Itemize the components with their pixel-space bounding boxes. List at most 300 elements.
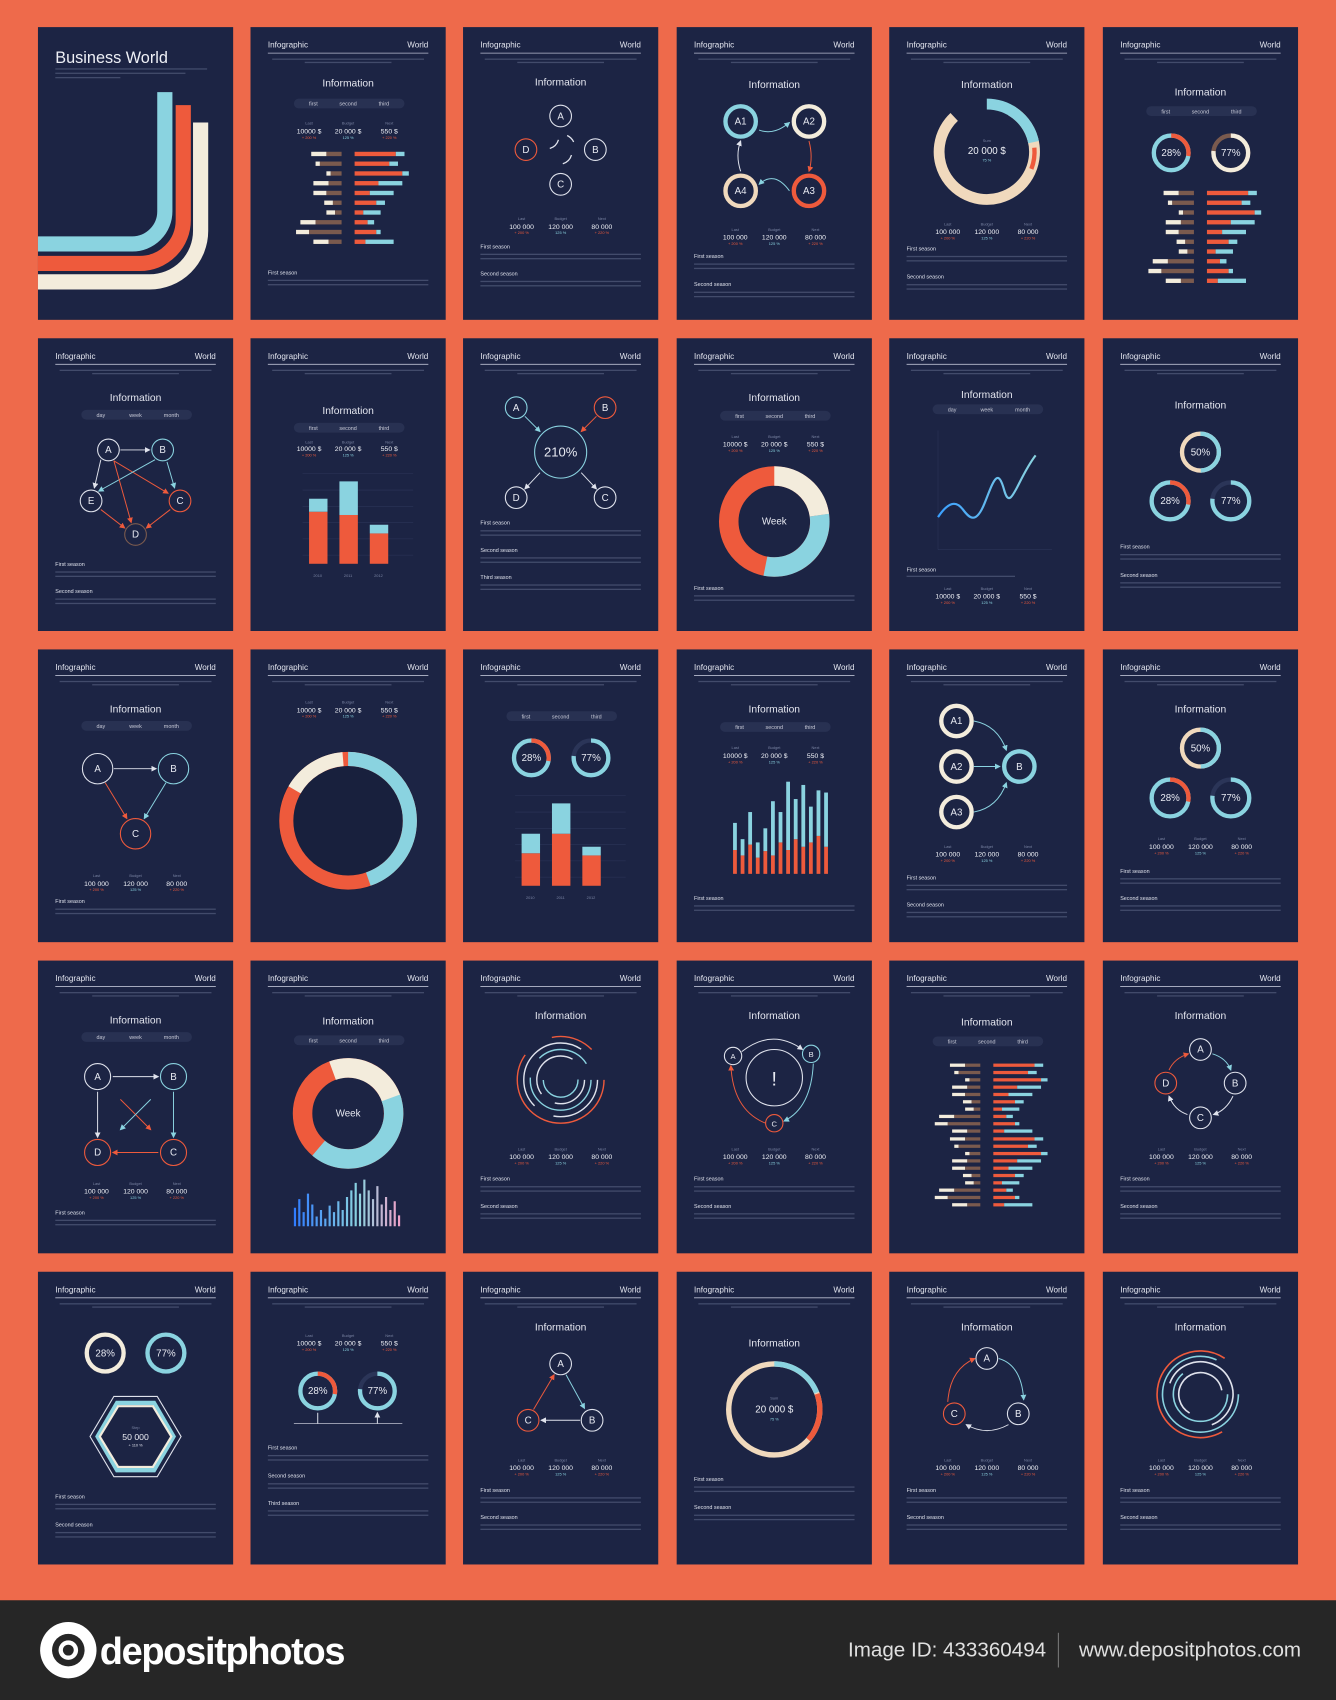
card 10: Week donut: + 220 %: [808, 448, 823, 453]
card 19: square ABCD: Information: [110, 1015, 162, 1026]
card 18: three donuts with stats: Infographic: [1120, 663, 1160, 672]
card 18: three donuts with stats: 125 %: [1195, 850, 1206, 855]
card 7: graph ABCDE: A: [105, 445, 112, 456]
card 21: concentric arcs: 80 000: [591, 1154, 612, 1161]
card 24: cycle ABCD: Last: [1158, 1146, 1166, 1151]
card 29: ABC arc cycle: Second season: [907, 1515, 944, 1521]
card 6: donuts + bars: [1103, 27, 1298, 320]
card 30: concentric rings: Second season: [1120, 1515, 1157, 1521]
card 10: Week donut: [677, 338, 872, 631]
card 27: triangle cycle: Last: [518, 1457, 526, 1462]
card 28: sum ring: Sum: [770, 1396, 778, 1401]
card 13: triangle ABC: 80 000: [166, 881, 187, 888]
card 30: concentric rings: + 200 %: [1154, 1472, 1169, 1477]
card 8: 3-bar chart: second: [339, 426, 357, 432]
card 12: three donuts: 77%: [1221, 496, 1241, 507]
card 13: triangle ABC: Next: [173, 873, 182, 878]
card 25: donuts + hexagon: 50 000: [122, 1432, 149, 1442]
card 18: three donuts with stats: World: [1260, 663, 1281, 672]
card 30: concentric rings: Budget: [1194, 1457, 1208, 1462]
card 5: sum ring: [889, 27, 1084, 320]
card 13: triangle ABC: World: [195, 663, 216, 672]
card 3: circles ABCD: 125 %: [555, 230, 567, 235]
card 27: triangle cycle: First season: [480, 1488, 510, 1494]
card 11: line chart: day: [948, 407, 957, 413]
card 19: square ABCD: Infographic: [55, 974, 96, 983]
card 3: circles ABCD: 100 000: [509, 224, 534, 231]
card 16: multi bar chart: Infographic: [694, 663, 734, 672]
card 13: triangle ABC: Last: [93, 873, 101, 878]
card 22: exclamation cycle: Next: [811, 1146, 820, 1151]
card 2: butterfly bars: + 200 %: [302, 135, 317, 140]
card 10: Week donut: 550 $: [807, 442, 824, 449]
card 3: circles ABCD: Infographic: [480, 41, 521, 50]
card 7: graph ABCDE: E: [88, 496, 95, 507]
card 4: A1-A4 ring cycle: 125 %: [769, 241, 780, 246]
card 26: stats + donuts + seasons: 550 $: [381, 1340, 398, 1347]
card 22: exclamation cycle: First season: [694, 1177, 723, 1183]
card 17: A1 A2 A3 to B: Budget: [981, 844, 994, 849]
card 11: line chart: month: [1015, 407, 1030, 413]
card 17: A1 A2 A3 to B: 80 000: [1018, 852, 1039, 859]
card 18: three donuts with stats: Second season: [1120, 896, 1157, 902]
card 13: triangle ABC: Information: [110, 704, 162, 715]
card 23: butterfly bars: third: [1017, 1040, 1028, 1046]
card 17: A1 A2 A3 to B: First season: [907, 875, 936, 881]
card 17: A1 A2 A3 to B: 120 000: [974, 852, 999, 859]
card 22: exclamation cycle: A: [731, 1052, 737, 1061]
card 2: butterfly bars: World: [407, 41, 428, 50]
card 18: three donuts with stats: 100 000: [1149, 844, 1174, 851]
card 11: line chart: Infographic: [907, 352, 947, 361]
card 11: line chart: 20 000 $: [974, 593, 1000, 600]
card 29: ABC arc cycle: C: [951, 1409, 958, 1420]
card 18: three donuts with stats: 77%: [1221, 793, 1241, 804]
card 8: 3-bar chart: Information: [322, 406, 374, 417]
card 25: donuts + hexagon: + 110 %: [128, 1442, 143, 1447]
card 24: cycle ABCD: Information: [1175, 1011, 1226, 1022]
card 13: triangle ABC: A: [94, 764, 101, 775]
card 5: sum ring: Last: [944, 222, 952, 227]
card 27: triangle cycle: 125 %: [555, 1472, 567, 1477]
card 26: stats + donuts + seasons: Infographic: [268, 1285, 308, 1294]
card 14: big ring: [250, 649, 446, 942]
card 8: 3-bar chart: + 200 %: [302, 452, 317, 457]
card 2: butterfly bars: Last: [305, 121, 314, 126]
card 27: triangle cycle: 80 000: [591, 1465, 612, 1472]
card 15: donuts + bar chart: Infographic: [480, 663, 521, 672]
card 6: donuts + bars: Information: [1175, 87, 1226, 98]
card 18: three donuts with stats: + 200 %: [1154, 850, 1169, 855]
card 27: triangle cycle: Infographic: [480, 1285, 521, 1294]
card 5: sum ring: 20 000 $: [968, 146, 1006, 157]
card 30: concentric rings: Last: [1158, 1457, 1166, 1462]
card 4: A1-A4 ring cycle: Last: [732, 227, 740, 232]
card 29: ABC arc cycle: Budget: [981, 1457, 994, 1462]
card 6: donuts + bars: first: [1161, 109, 1171, 115]
card 14: big ring: Next: [385, 700, 394, 705]
card 24: cycle ABCD: 125 %: [1195, 1160, 1206, 1165]
card 19: square ABCD: World: [195, 974, 216, 983]
card 17: A1 A2 A3 to B: 125 %: [981, 858, 993, 863]
footer image id: Image ID: 433360494: [848, 1639, 1046, 1662]
card 5: sum ring: Second season: [907, 275, 944, 281]
card 24: cycle ABCD: First season: [1120, 1177, 1150, 1183]
card 27: triangle cycle: World: [620, 1285, 641, 1294]
card 16: multi bar chart: 10000 $: [723, 753, 748, 760]
card 22: exclamation cycle: 80 000: [805, 1154, 826, 1161]
card 2: butterfly bars: third: [379, 102, 389, 108]
card 3: circles ABCD: C: [557, 180, 564, 191]
card 9: 210% hub: Infographic: [480, 352, 521, 361]
card 26: stats + donuts + seasons: Budget: [342, 1333, 355, 1338]
cover stripes: [38, 92, 201, 282]
card 2: butterfly bars: + 220 %: [382, 135, 397, 140]
card 27: triangle cycle: Information: [535, 1322, 587, 1333]
card 8: 3-bar chart: 20 000 $: [335, 446, 362, 453]
card 13: triangle ABC: First season: [55, 899, 85, 905]
card 27: triangle cycle: B: [589, 1416, 595, 1427]
card 16: multi bar chart: Last: [732, 745, 740, 750]
card 8: 3-bar chart: Last: [305, 439, 314, 444]
card 15: donuts + bar chart: 2011: [556, 895, 565, 900]
card 5: sum ring: Sum: [983, 138, 991, 143]
card 25: donuts + hexagon: 28%: [95, 1348, 115, 1359]
card 30: concentric rings: World: [1260, 1285, 1281, 1294]
card 4: A1-A4 ring cycle: 120 000: [762, 235, 787, 242]
card 10: Week donut: Last: [732, 434, 740, 439]
card 10: Week donut: Information: [749, 393, 800, 404]
card 11: line chart: 10000 $: [935, 593, 960, 600]
card 13: triangle ABC: week: [128, 724, 142, 730]
card 9: 210% hub: B: [602, 403, 608, 414]
card 4: A1-A4 ring cycle: World: [833, 41, 855, 50]
card 3: circles ABCD: [463, 27, 658, 320]
card 13: triangle ABC: 125 %: [130, 887, 142, 892]
card 11: line chart: [889, 338, 1084, 631]
card 11: line chart: Last: [944, 586, 952, 591]
card 7: graph ABCDE: Information: [110, 393, 162, 404]
card 25: donuts + hexagon: [38, 1272, 233, 1564]
card 19: square ABCD: 80 000: [166, 1189, 187, 1196]
card 17: A1 A2 A3 to B: A3: [950, 807, 962, 818]
card 25: donuts + hexagon: Infographic: [55, 1285, 96, 1294]
card 3: circles ABCD: + 200 %: [514, 230, 529, 235]
card 8: 3-bar chart: third: [379, 426, 389, 432]
card 3: circles ABCD: Second season: [480, 271, 518, 277]
card 12: three donuts: 28%: [1160, 496, 1180, 507]
card 7: graph ABCDE: First season: [55, 562, 85, 568]
card 12: three donuts: Second season: [1120, 573, 1157, 579]
card 26: stats + donuts + seasons: 77%: [368, 1386, 387, 1397]
card 5: sum ring: Budget: [981, 222, 994, 227]
card 20: week donut + histogram: third: [379, 1038, 389, 1044]
card 28: sum ring: Infographic: [694, 1285, 734, 1294]
card 24: cycle ABCD: B: [1232, 1078, 1238, 1089]
card 24: cycle ABCD: D: [1162, 1078, 1169, 1089]
card 19: square ABCD: 125 %: [130, 1195, 142, 1200]
card 16: multi bar chart: + 200 %: [728, 759, 743, 764]
card 3: circles ABCD: + 220 %: [595, 230, 610, 235]
card 24: cycle ABCD: + 220 %: [1234, 1160, 1249, 1165]
card 17: A1 A2 A3 to B: A2: [950, 762, 962, 773]
card 14: big ring: 20 000 $: [335, 707, 362, 714]
card 26: stats + donuts + seasons: + 200 %: [302, 1347, 317, 1352]
card 5: sum ring: 100 000: [935, 229, 960, 236]
card 21: concentric arcs: Infographic: [480, 974, 521, 983]
card 5: sum ring: World: [1046, 41, 1067, 50]
card 22: exclamation cycle: + 200 %: [728, 1160, 743, 1165]
card 10: Week donut: 20 000 $: [761, 442, 788, 449]
card 3: circles ABCD: 120 000: [548, 224, 573, 231]
card 23: butterfly bars: [889, 961, 1084, 1253]
card 22: exclamation cycle: [677, 961, 872, 1253]
card 29: ABC arc cycle: First season: [907, 1488, 936, 1494]
card 17: A1 A2 A3 to B: 100 000: [935, 852, 960, 859]
card 20: week donut + histogram: first: [309, 1038, 318, 1044]
card 3: circles ABCD: Last: [518, 216, 526, 221]
card 10: Week donut: Next: [811, 434, 820, 439]
card 4: A1-A4 ring cycle: Infographic: [694, 41, 734, 50]
card 8: 3-bar chart: first: [309, 426, 318, 432]
card 27: triangle cycle: 100 000: [509, 1465, 534, 1472]
card 28: sum ring: 75 %: [770, 1416, 779, 1421]
card 25: donuts + hexagon: 77%: [156, 1348, 176, 1359]
card 18: three donuts with stats: Last: [1158, 836, 1166, 841]
card 6: donuts + bars: World: [1260, 41, 1281, 50]
card 11: line chart: World: [1046, 352, 1067, 361]
card 2: butterfly bars: Next: [385, 121, 394, 126]
card 10: Week donut: 10000 $: [723, 442, 748, 449]
card 29: ABC arc cycle: + 220 %: [1021, 1472, 1036, 1477]
card 22: exclamation cycle: World: [833, 974, 855, 983]
card 8: 3-bar chart: World: [407, 352, 428, 361]
card 13: triangle ABC: Infographic: [55, 663, 96, 672]
card 14: big ring: + 220 %: [382, 714, 397, 719]
card 18: three donuts with stats: Budget: [1194, 836, 1208, 841]
card 14: big ring: 550 $: [381, 707, 398, 714]
card 4: A1-A4 ring cycle: + 220 %: [808, 241, 823, 246]
card 15: donuts + bar chart: second: [552, 714, 569, 720]
card 13: triangle ABC: day: [96, 724, 106, 730]
card 3: circles ABCD: 80 000: [591, 224, 612, 231]
card 4: A1-A4 ring cycle: 100 000: [723, 235, 748, 242]
card 28: sum ring: Information: [749, 1339, 800, 1350]
card 11: line chart: Next: [1024, 586, 1033, 591]
card 3: circles ABCD: A: [557, 111, 564, 122]
bars: [296, 152, 409, 244]
card 13: triangle ABC: + 220 %: [170, 887, 184, 892]
card 2: butterfly bars: first: [309, 102, 318, 108]
card 26: stats + donuts + seasons: First season: [268, 1446, 297, 1452]
card 16: multi bar chart: Information: [749, 704, 800, 715]
card 5: sum ring: Infographic: [907, 41, 947, 50]
card 20: week donut + histogram: [250, 961, 446, 1253]
card 24: cycle ABCD: Budget: [1194, 1146, 1208, 1151]
footer brand: depositphotos: [100, 1631, 344, 1673]
card 28: sum ring: First season: [694, 1477, 723, 1483]
card 24: cycle ABCD: 120 000: [1188, 1154, 1213, 1161]
card 20: week donut + histogram: Infographic: [268, 974, 308, 983]
card 17: A1 A2 A3 to B: + 200 %: [941, 858, 956, 863]
card 8: 3-bar chart: [250, 338, 446, 631]
card 7: graph ABCDE: Infographic: [55, 352, 96, 361]
card 10: Week donut: Week: [762, 517, 787, 528]
card 4: A1-A4 ring cycle: [677, 27, 872, 320]
card 4: A1-A4 ring cycle: Next: [811, 227, 820, 232]
card 9: 210% hub: World: [620, 352, 641, 361]
card 22: exclamation cycle: Infographic: [694, 974, 734, 983]
card 22: exclamation cycle: Last: [732, 1146, 740, 1151]
card 19: square ABCD: A: [94, 1072, 101, 1083]
card 22: exclamation cycle: + 220 %: [808, 1160, 823, 1165]
footer url: www.depositphotos.com: [1078, 1639, 1301, 1662]
card 30: concentric rings: + 220 %: [1234, 1472, 1249, 1477]
card 9: 210% hub: Second season: [480, 548, 518, 554]
card 30: concentric rings: 120 000: [1188, 1465, 1213, 1472]
card 12: three donuts: World: [1260, 352, 1281, 361]
card 13: triangle ABC: B: [170, 764, 177, 775]
card 21: concentric arcs: Budget: [554, 1146, 568, 1151]
card 10: Week donut: third: [805, 414, 815, 420]
card 5: sum ring: Next: [1024, 222, 1033, 227]
card 6: donuts + bars: third: [1231, 109, 1241, 115]
card 2: butterfly bars: First season: [268, 270, 297, 276]
card 24: cycle ABCD: World: [1260, 974, 1281, 983]
card 15: donuts + bar chart: [463, 649, 658, 942]
card 28: sum ring: World: [833, 1285, 855, 1294]
card 19: square ABCD: + 220 %: [170, 1195, 184, 1200]
card 21: concentric arcs: + 220 %: [595, 1160, 610, 1165]
card 7: graph ABCDE: B: [159, 445, 166, 456]
card 11: line chart: 550 $: [1019, 593, 1037, 600]
card 16: multi bar chart: 125 %: [769, 759, 780, 764]
card 19: square ABCD: Last: [93, 1181, 101, 1186]
card 16: multi bar chart: third: [805, 725, 815, 731]
card 26: stats + donuts + seasons: World: [407, 1285, 428, 1294]
card 12: three donuts: [1103, 338, 1298, 631]
card 16: multi bar chart: + 220 %: [808, 759, 823, 764]
card 17: A1 A2 A3 to B: + 220 %: [1021, 858, 1036, 863]
card 5: sum ring: First season: [907, 246, 936, 252]
card 14: big ring: World: [407, 663, 428, 672]
card 26: stats + donuts + seasons: 10000 $: [297, 1340, 322, 1347]
card 15: donuts + bar chart: 28%: [522, 753, 541, 764]
card 24: cycle ABCD: [1103, 961, 1298, 1253]
card 19: square ABCD: C: [170, 1148, 177, 1159]
card 16: multi bar chart: First season: [694, 896, 723, 902]
card 5: sum ring: + 220 %: [1021, 236, 1036, 241]
card 23: butterfly bars: Information: [961, 1018, 1013, 1029]
card 22: exclamation cycle: !: [772, 1068, 777, 1090]
card 12: three donuts: First season: [1120, 545, 1150, 551]
card 2: butterfly bars: Budget: [342, 121, 355, 126]
card 24: cycle ABCD: Next: [1238, 1146, 1247, 1151]
card 24: cycle ABCD: Infographic: [1120, 974, 1160, 983]
card 8: 3-bar chart: 550 $: [381, 446, 398, 453]
card 11: line chart: First season: [907, 567, 936, 573]
card 29: ABC arc cycle: World: [1046, 1285, 1067, 1294]
card 17: A1 A2 A3 to B: Infographic: [907, 663, 947, 672]
card 19: square ABCD: B: [170, 1072, 177, 1083]
card 2: butterfly bars: Information: [322, 79, 374, 90]
card 16: multi bar chart: 550 $: [807, 753, 824, 760]
card 26: stats + donuts + seasons: Last: [305, 1333, 314, 1338]
card 25: donuts + hexagon: First season: [55, 1494, 85, 1500]
card 29: ABC arc cycle: 80 000: [1018, 1465, 1039, 1472]
card 11: line chart: 125 %: [981, 600, 993, 605]
card 14: big ring: Budget: [342, 700, 355, 705]
card 4: A1-A4 ring cycle: Information: [749, 80, 800, 91]
card 26: stats + donuts + seasons: Next: [385, 1333, 394, 1338]
card 24: cycle ABCD: 80 000: [1231, 1154, 1252, 1161]
card 9: 210% hub: [463, 338, 658, 631]
card 2: butterfly bars: 125 %: [343, 135, 354, 140]
card 15: donuts + bar chart: 77%: [581, 753, 601, 764]
card 22: exclamation cycle: C: [772, 1119, 778, 1128]
card 7: graph ABCDE: World: [195, 352, 216, 361]
card 10: Week donut: 125 %: [769, 448, 780, 453]
card 22: exclamation cycle: 125 %: [769, 1160, 780, 1165]
card 19: square ABCD: [38, 961, 233, 1253]
card 21: concentric arcs: [463, 961, 658, 1253]
card 13: triangle ABC: 100 000: [84, 881, 109, 888]
card 24: cycle ABCD: + 200 %: [1154, 1160, 1169, 1165]
card 27: triangle cycle: Second season: [480, 1515, 518, 1521]
card 4: A1-A4 ring cycle: A2: [803, 117, 815, 128]
card 10: Week donut: second: [766, 414, 783, 420]
card 8: 3-bar chart: 125 %: [343, 452, 354, 457]
card 11: line chart: Budget: [981, 586, 994, 591]
card 18: three donuts with stats: 50%: [1191, 743, 1211, 754]
card 9: 210% hub: A: [513, 403, 520, 414]
card 21: concentric arcs: First season: [480, 1177, 510, 1183]
card 16: multi bar chart: first: [735, 725, 744, 731]
card 18: three donuts with stats: 28%: [1160, 793, 1180, 804]
card 10: Week donut: Infographic: [694, 352, 734, 361]
card 2: butterfly bars: 20 000 $: [335, 128, 362, 135]
card 25: donuts + hexagon: Step: [132, 1425, 140, 1430]
card 18: three donuts with stats: First season: [1120, 869, 1150, 875]
card 9: 210% hub: First season: [480, 521, 510, 527]
card 25: donuts + hexagon: Second season: [55, 1523, 93, 1529]
card 21: concentric arcs: + 200 %: [514, 1160, 529, 1165]
card 11: line chart: week: [980, 407, 993, 413]
card 2: butterfly bars: second: [339, 102, 357, 108]
card 13: triangle ABC: 120 000: [123, 881, 148, 888]
card 24: cycle ABCD: A: [1197, 1045, 1204, 1056]
card 8: 3-bar chart: 2012: [374, 573, 383, 578]
card 4: A1-A4 ring cycle: A4: [735, 186, 747, 197]
card 3: circles ABCD: World: [620, 41, 641, 50]
card 2: butterfly bars: Infographic: [268, 41, 308, 50]
card 21: concentric arcs: Second season: [480, 1204, 518, 1210]
card 3: circles ABCD: Information: [535, 78, 587, 89]
card 30: concentric rings: First season: [1120, 1488, 1150, 1494]
card 10: Week donut: Budget: [768, 434, 781, 439]
card 14: big ring: Last: [305, 700, 314, 705]
card 7: graph ABCDE: month: [164, 413, 179, 419]
card 5: sum ring: 75 %: [982, 158, 992, 163]
cover title: Business World: [55, 49, 168, 67]
card 29: ABC arc cycle: 100 000: [935, 1465, 960, 1472]
card 27: triangle cycle: Next: [598, 1457, 607, 1462]
card 8: 3-bar chart: 2011: [344, 573, 352, 578]
card 18: three donuts with stats: Information: [1175, 704, 1226, 715]
card 19: square ABCD: 100 000: [84, 1189, 109, 1196]
card 22: exclamation cycle: B: [809, 1050, 814, 1059]
card 26: stats + donuts + seasons: + 220 %: [382, 1347, 397, 1352]
